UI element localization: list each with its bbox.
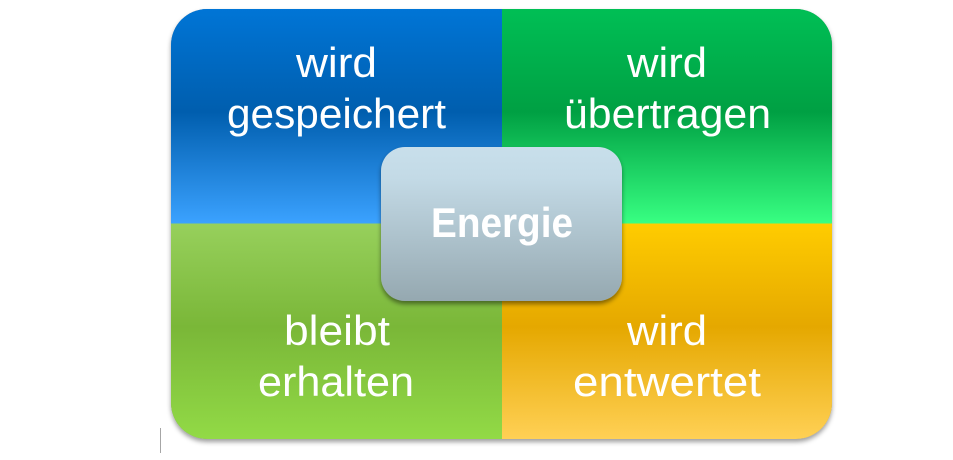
label: wird übertragen — [564, 39, 771, 137]
cycle diagram background — [171, 9, 832, 439]
label: bleibt erhalten: erhalten — [258, 358, 414, 405]
center label: Energie — [431, 199, 573, 246]
label: bleibt erhalten — [258, 307, 414, 405]
label: wird übertragen: übertragen — [564, 90, 771, 137]
label: wird übertragen: wird — [626, 39, 707, 86]
label: bleibt erhalten: bleibt — [284, 307, 390, 354]
panel: wird gespeichert — [171, 9, 502, 224]
label: wird entwertet — [573, 307, 761, 405]
quadrant panels — [171, 9, 832, 439]
label: wird gespeichert: wird — [295, 39, 377, 86]
center box: Energie — [381, 147, 622, 301]
stray vertical line — [160, 428, 161, 453]
label: wird entwertet: wird — [626, 307, 707, 354]
label: wird entwertet: entwertet — [573, 358, 761, 405]
rounded base shadow — [171, 9, 832, 439]
panel: wird entwertet — [502, 224, 832, 439]
panel: wird übertragen — [502, 9, 832, 224]
panel: bleibt erhalten — [171, 224, 502, 439]
label: wird gespeichert — [227, 39, 446, 137]
label: wird gespeichert: gespeichert — [227, 90, 446, 137]
